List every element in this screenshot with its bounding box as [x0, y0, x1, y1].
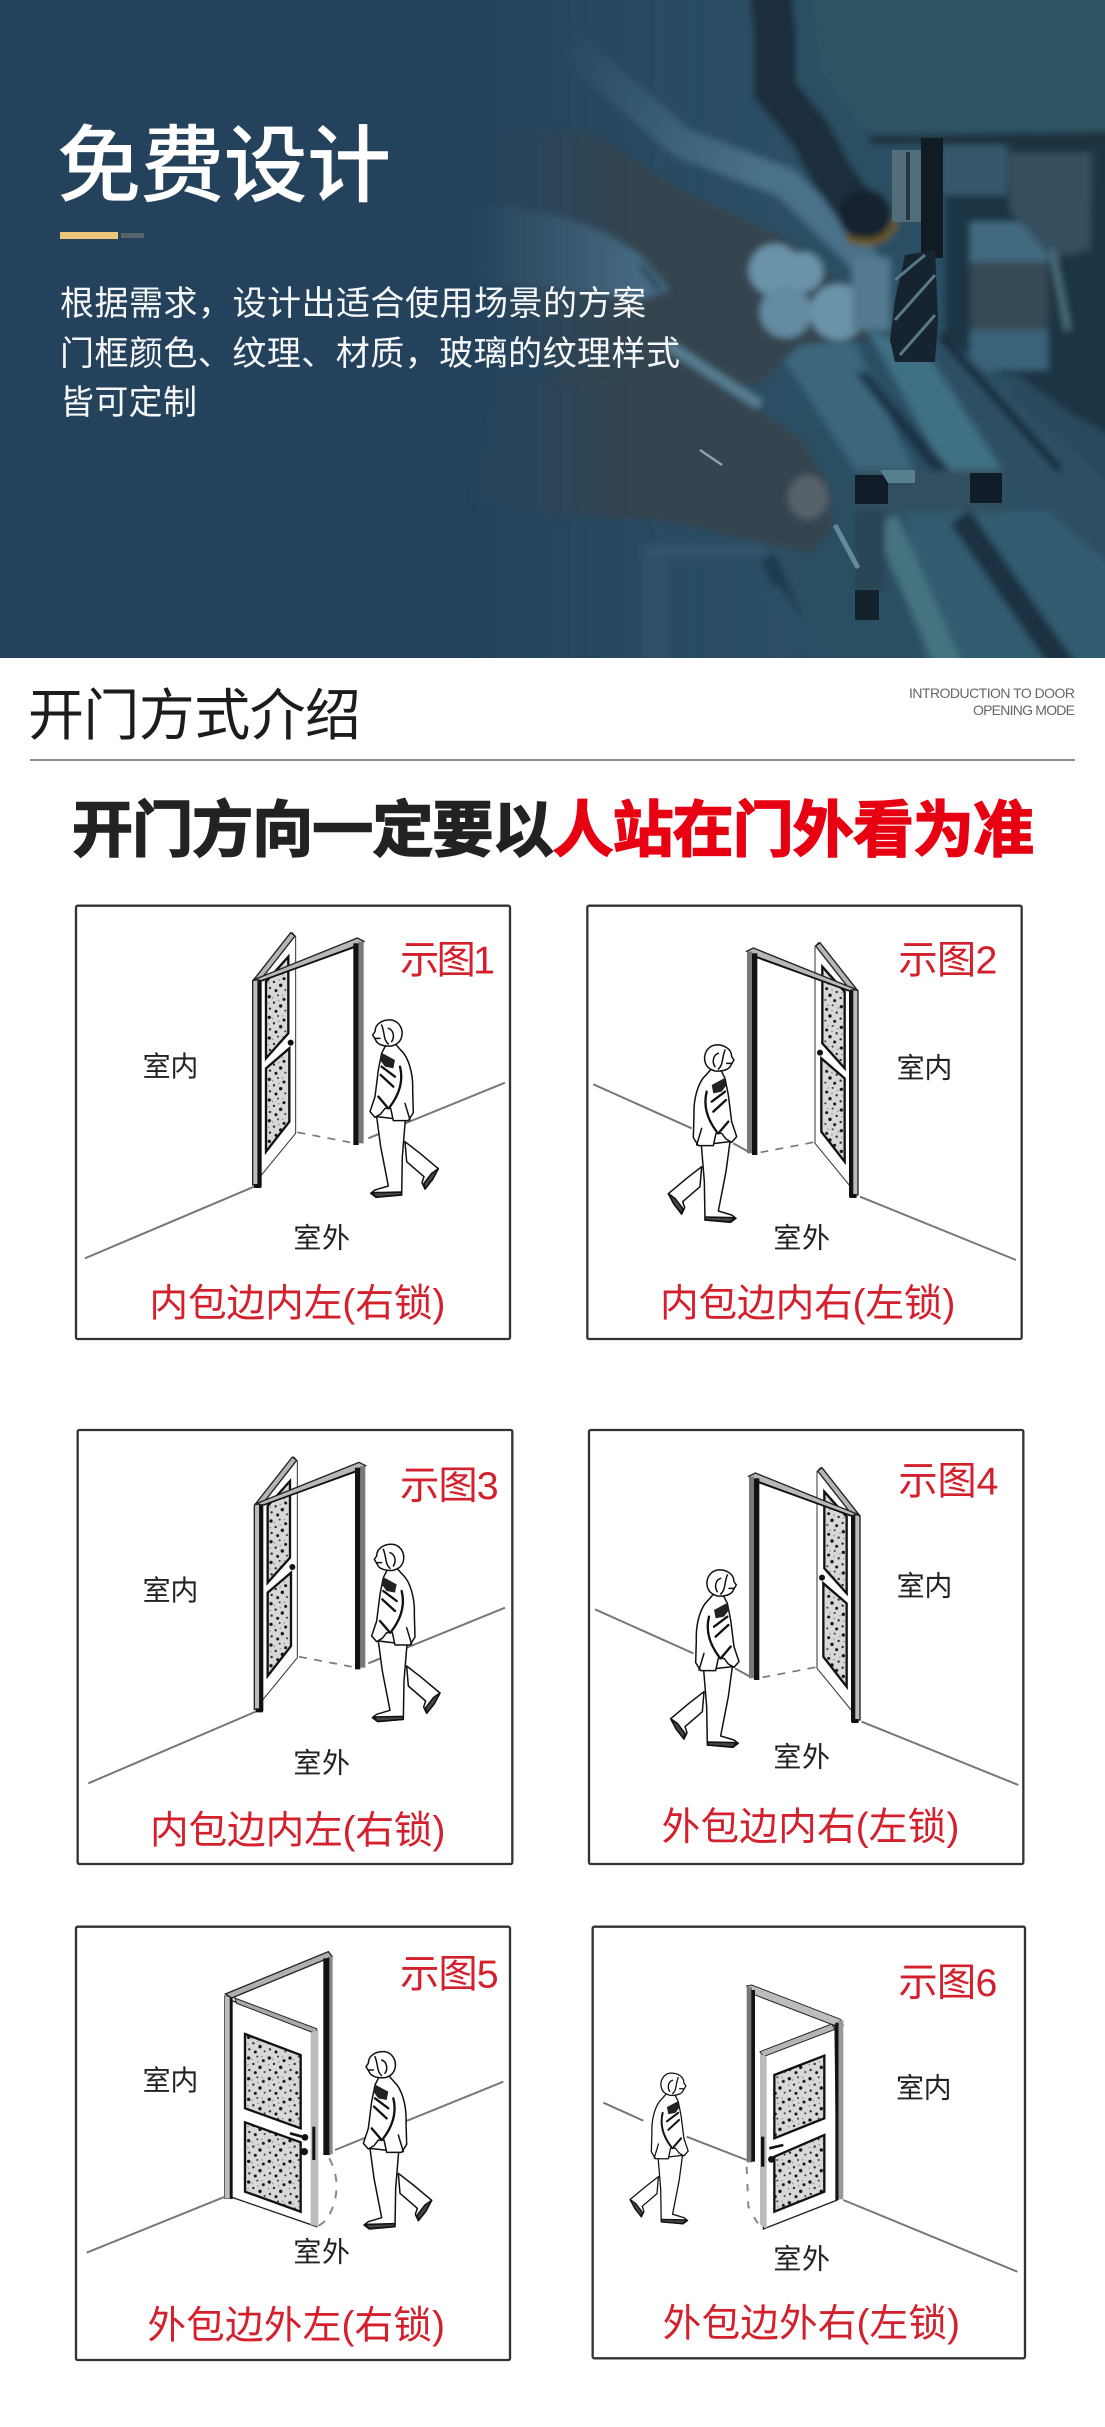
- hero title: 免费设计: [57, 119, 391, 213]
- label indoor: 室内: [143, 1051, 198, 1082]
- door: inward-opening right: [747, 943, 858, 1198]
- person: [372, 1544, 440, 1722]
- hero description: 根据需求，设计出适合使用场景的方案: [60, 285, 646, 323]
- panel: diagram 5: [76, 1927, 510, 2360]
- section subtitle english: [909, 685, 1075, 718]
- panel: diagram 1: [76, 906, 510, 1339]
- label outdoor: 室外: [293, 2237, 350, 2268]
- diagram number: 示图2: [898, 938, 997, 982]
- panel: diagram 6: [593, 1927, 1025, 2358]
- hero description: [60, 285, 680, 422]
- door: outward-opening right: [747, 1985, 843, 2229]
- person: [671, 1570, 739, 1747]
- diagram number: 示图1: [400, 938, 495, 982]
- label outdoor: 室外: [293, 1223, 350, 1254]
- door: inward-opening left: [253, 933, 364, 1188]
- section subtitle english: OPENING MODE: [973, 702, 1075, 718]
- label indoor: 室内: [143, 1575, 198, 1606]
- caption: 内包边内右(左锁): [660, 1283, 955, 1326]
- person: [363, 2052, 432, 2229]
- label indoor: 室内: [897, 1052, 952, 1083]
- label indoor: 室内: [143, 2065, 198, 2096]
- diagram number: 示图4: [898, 1459, 998, 1503]
- headline: door direction rule: 开门方向一定要以人站在门外看为准: [72, 796, 1034, 864]
- panel: diagram 3: [78, 1430, 512, 1864]
- diagram number: 示图6: [898, 1961, 997, 2005]
- diagram number: 示图5: [400, 1952, 499, 1996]
- person: [370, 1020, 438, 1197]
- label indoor: 室内: [896, 2072, 952, 2103]
- door: outward-frame inward-opening right: [749, 1468, 860, 1723]
- label outdoor: 室外: [293, 1748, 350, 1779]
- label outdoor: 室外: [773, 1223, 830, 1254]
- panel: hero banner: [0, 0, 1105, 700]
- hero background photo: hands guiding aluminium profile under a milling tool: [0, 0, 1105, 700]
- label indoor: 室内: [897, 1571, 952, 1602]
- label outdoor: 室外: [773, 1742, 830, 1773]
- caption: 内包边内左(右锁): [150, 1809, 445, 1852]
- person: [630, 2073, 688, 2224]
- label outdoor: 室外: [773, 2243, 830, 2274]
- hero accent bar: [60, 232, 144, 239]
- caption: 外包边外左(右锁): [147, 2304, 445, 2347]
- diagram number: 示图3: [400, 1464, 499, 1508]
- caption: 外包边内右(左锁): [662, 1806, 959, 1849]
- section subtitle english: INTRODUCTION TO DOOR: [909, 685, 1075, 701]
- caption: 内包边内左(右锁): [149, 1283, 445, 1326]
- hero description: 皆可定制: [60, 384, 197, 422]
- caption: 外包边外右(左锁): [663, 2303, 960, 2346]
- panel: diagram 4: [589, 1430, 1023, 1864]
- panel: diagram 2: [587, 906, 1022, 1339]
- hero description: 门框颜色、纹理、材质，玻璃的纹理样式: [60, 335, 680, 373]
- person: [668, 1045, 737, 1222]
- door: inward-opening left: [254, 1457, 366, 1712]
- door: outward-opening left: [224, 1952, 337, 2227]
- section heading: 开门方式介绍: [28, 684, 361, 747]
